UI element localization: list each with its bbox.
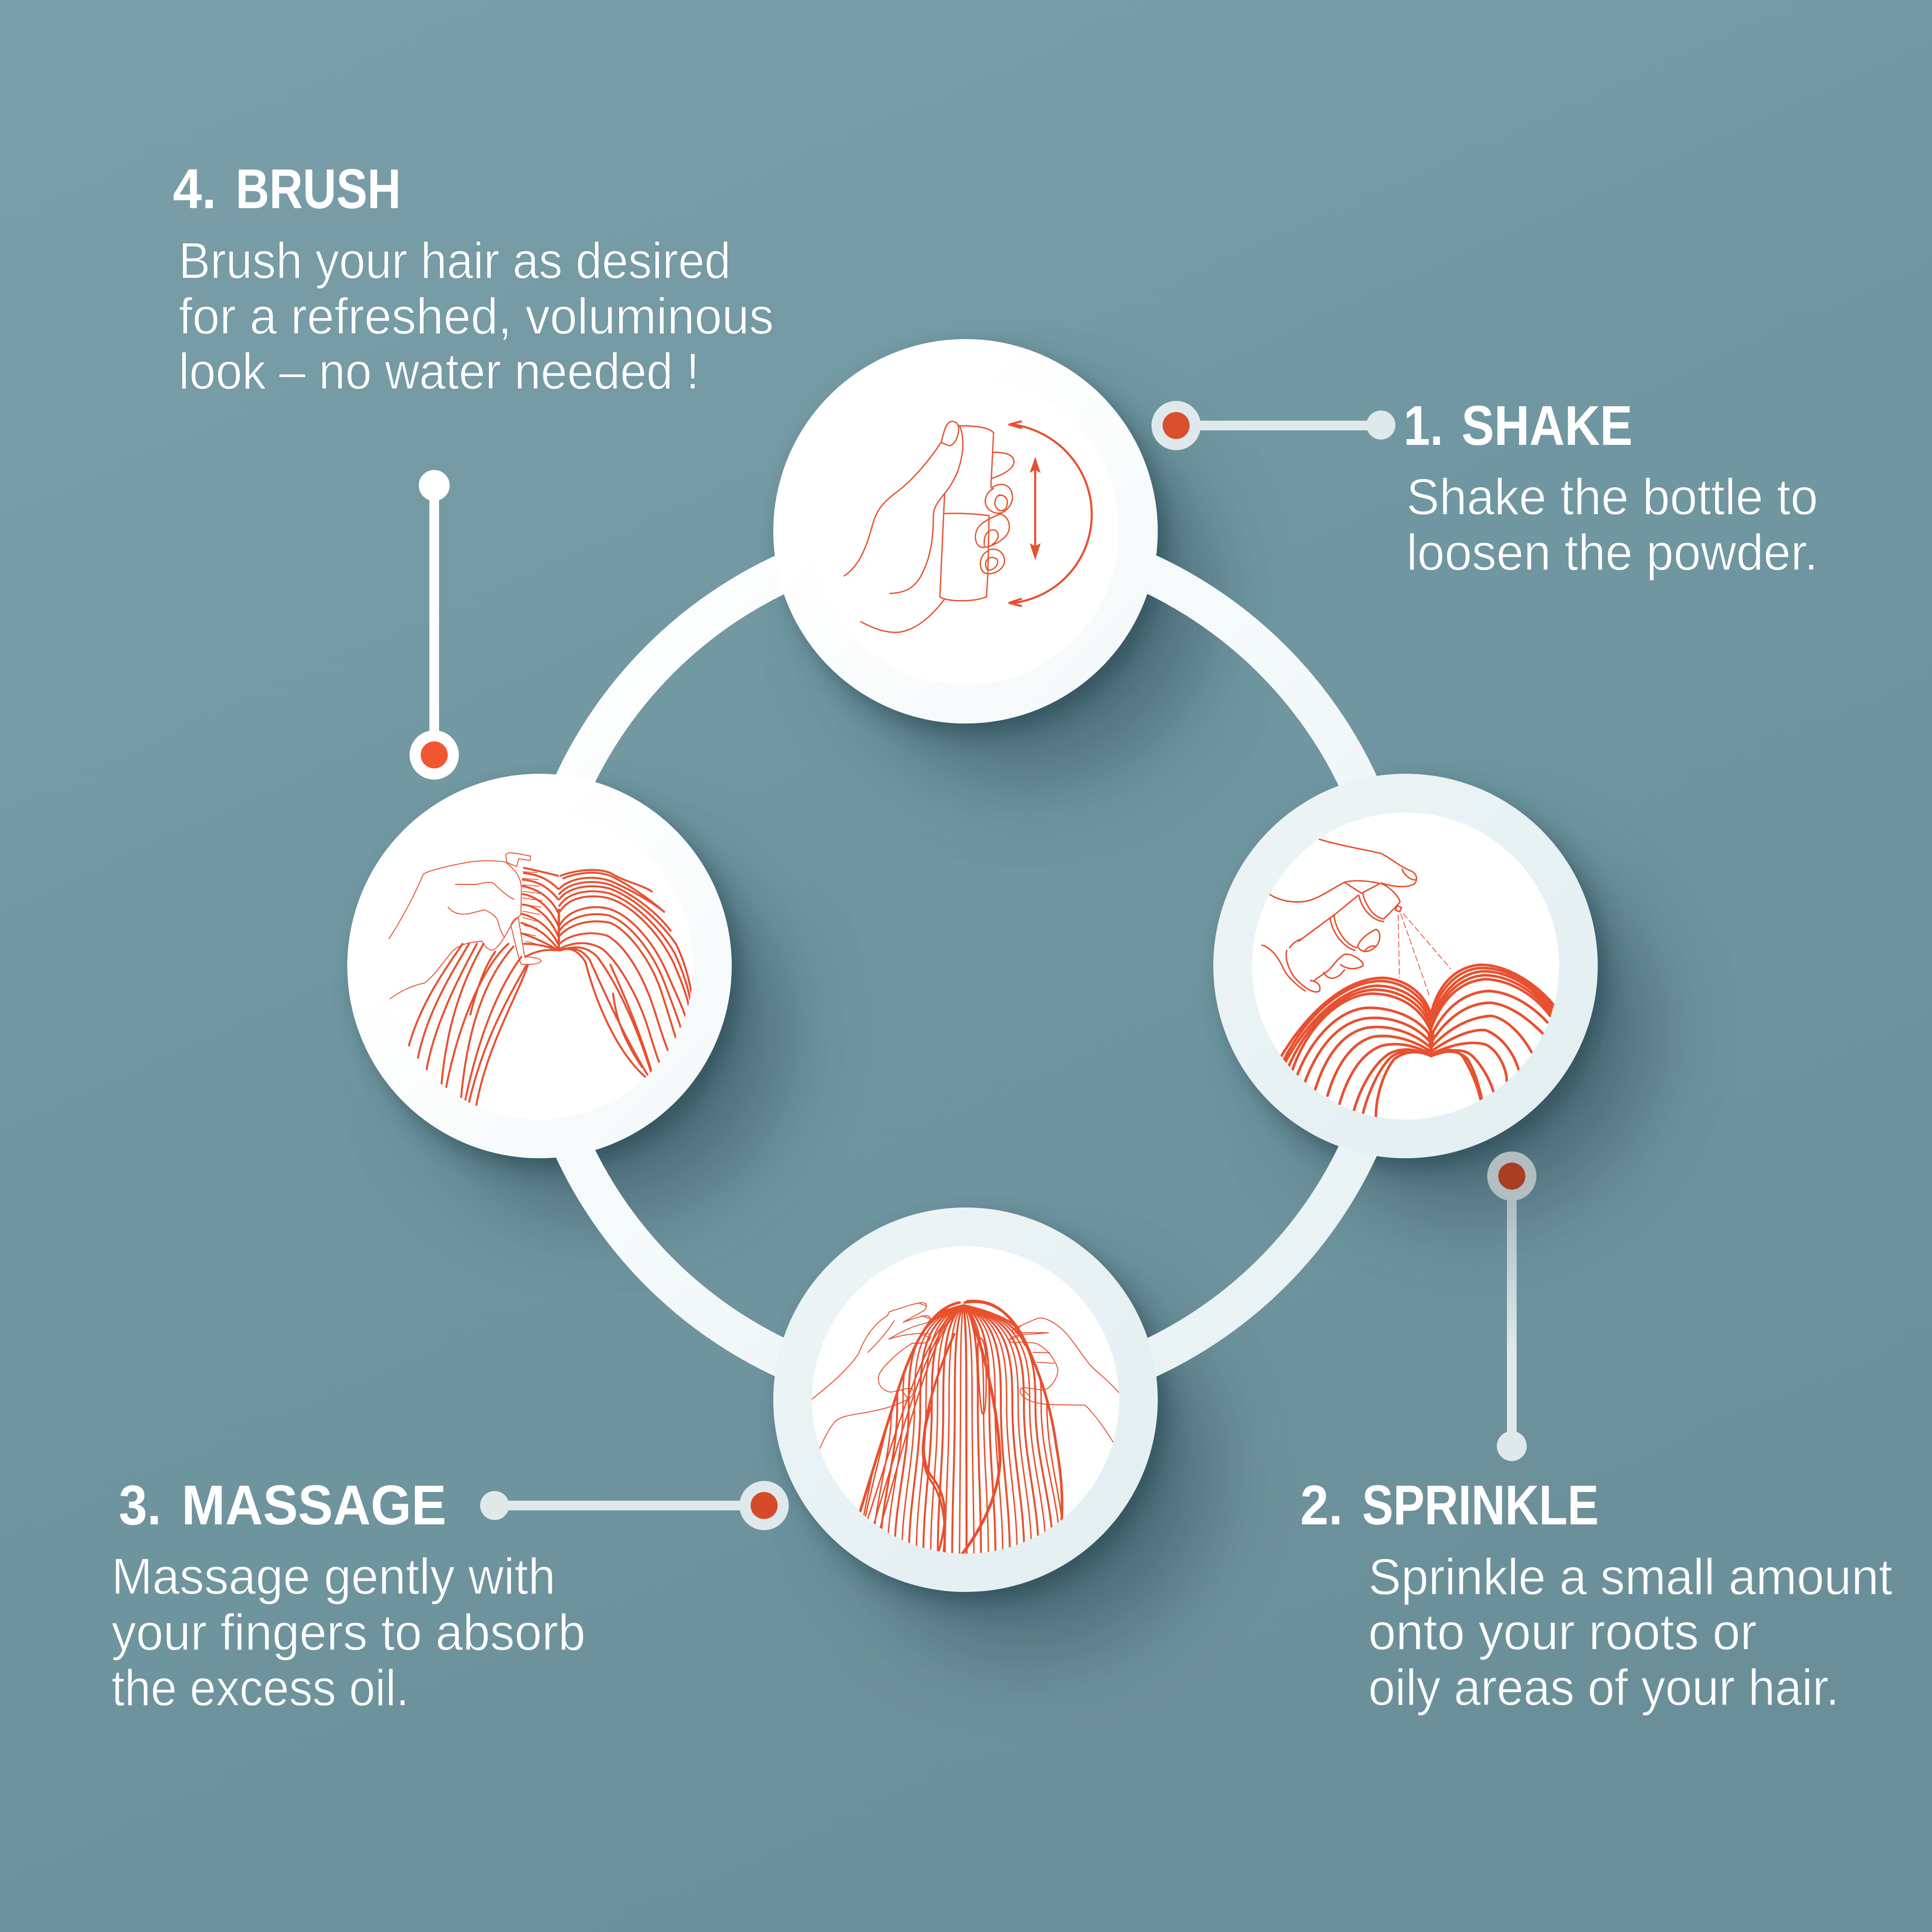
text: step 3 massage: the excess oil. — [112, 1660, 409, 1717]
panel: step 4 circle — [347, 774, 732, 1158]
connector: step 3 massage — [480, 1481, 789, 1530]
text: step 3 massage: Massage gently with — [112, 1548, 555, 1605]
text: step 1 shake: loosen the powder. — [1406, 524, 1818, 581]
icon: hands massaging hair — [789, 1301, 1143, 1554]
text: step 2 sprinkle: SPRINKLE — [1362, 1474, 1599, 1536]
text: step 4 brush: Brush your hair as desired — [179, 232, 731, 289]
panel: step 3 circle — [773, 1208, 1158, 1592]
panel: step 1 circle — [773, 339, 1158, 724]
text: step 4 brush: 4. — [173, 157, 216, 220]
text: step 4 brush — [173, 157, 774, 400]
text: step 4 brush: BRUSH — [236, 157, 401, 220]
text: step 1 shake: Shake the bottle to — [1406, 469, 1818, 526]
text: step 2 sprinkle — [1300, 1474, 1892, 1716]
text: step 4 brush: look – no water needed ! — [179, 343, 699, 400]
text: step 3 massage: your fingers to absorb — [112, 1604, 585, 1661]
connector: step 4 brush — [410, 470, 459, 780]
text: step 1 shake: SHAKE — [1462, 394, 1633, 457]
soft long shadows — [418, 413, 1652, 1649]
text: step 2 sprinkle: Sprinkle a small amount — [1368, 1548, 1892, 1605]
tight contact shadows — [358, 352, 1606, 1603]
text: step 4 brush: for a refreshed, voluminous — [179, 288, 774, 345]
icon: spraying powder on hair — [1262, 839, 1554, 1117]
text: step 2 sprinkle: oily areas of your hair. — [1368, 1659, 1839, 1716]
icon: brushing hair — [364, 853, 692, 1105]
process ring — [533, 533, 1399, 1399]
text: step 2 sprinkle: onto your roots or — [1368, 1604, 1757, 1661]
text: step 1 shake: 1. — [1404, 394, 1443, 457]
text: step 1 shake — [1404, 394, 1818, 581]
connector: step 1 shake — [1151, 401, 1395, 450]
connector: step 2 sprinkle — [1487, 1151, 1536, 1461]
text: step 3 massage: MASSAGE — [182, 1474, 446, 1536]
panel: step 2 circle — [1213, 774, 1598, 1158]
text: step 3 massage: 3. — [119, 1474, 161, 1536]
text: step 2 sprinkle: 2. — [1300, 1474, 1343, 1536]
icon: hand shaking bottle — [844, 421, 1092, 632]
text: step 3 massage — [112, 1474, 585, 1717]
